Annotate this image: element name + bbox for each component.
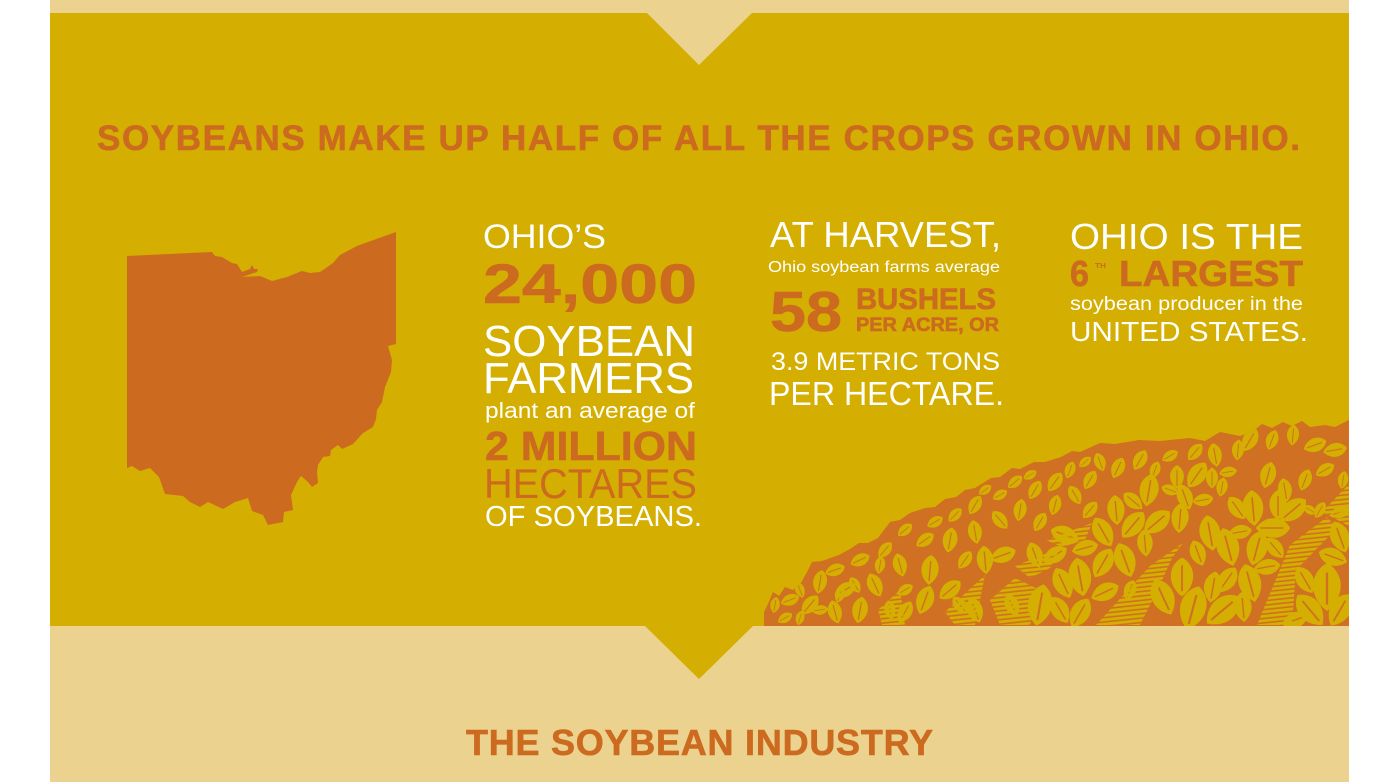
text block: 24,000 farmers: OF SOYBEANS.: [485, 501, 702, 533]
text block: harvest yield: BUSHELS: [856, 283, 996, 316]
text block: harvest yield: [768, 214, 1004, 412]
furrows: [878, 484, 1349, 625]
icon: Ohio state map: [127, 232, 396, 525]
text block: 24,000 farmers: HECTARES: [484, 460, 697, 507]
text block: 6th largest producer: LARGEST: [1119, 253, 1303, 294]
illustration: soybean field: [764, 420, 1358, 633]
text block: harvest yield: AT HARVEST,: [770, 214, 1001, 255]
text block: 24,000 farmers: 24,000: [483, 252, 697, 315]
text block: 6th largest producer: OHIO IS THE: [1070, 216, 1303, 257]
text block: 6th largest producer: UNITED STATES.: [1070, 316, 1308, 347]
text block: 6th largest producer: [1070, 216, 1308, 347]
text block: 24,000 farmers: [483, 218, 702, 533]
text block: 6th largest producer: soybean producer in the: [1070, 294, 1303, 315]
background: top cream band: [50, 0, 1349, 13]
text block: 24,000 farmers: OHIO’S: [483, 218, 606, 256]
text block: harvest yield: 58: [770, 280, 842, 344]
text block: 6th largest producer: 6: [1070, 253, 1089, 294]
text block: 24,000 farmers: 2 MILLION: [485, 423, 697, 469]
heading: soybeans half of crops: SOYBEANS MAKE UP HALF OF ALL THE CROPS GROWN IN OHIO.: [97, 119, 1300, 158]
panel: mustard Ohio section: [50, 13, 1349, 626]
text block: 24,000 farmers: SOYBEAN: [483, 317, 695, 366]
arrow: top notch: [647, 13, 752, 65]
heading: the soybean industry: THE SOYBEAN INDUSTRY: [466, 722, 933, 763]
text block: harvest yield: 3.9 METRIC TONS: [771, 348, 1000, 376]
text block: 24,000 farmers: FARMERS: [483, 354, 694, 403]
text block: harvest yield: PER ACRE, OR: [856, 315, 999, 336]
text block: harvest yield: PER HECTARE.: [769, 375, 1004, 412]
background: bottom cream section: [50, 626, 1349, 782]
text block: 6th largest producer: TH: [1095, 263, 1106, 270]
text block: 24,000 farmers: plant an average of: [485, 398, 696, 423]
arrow: bottom pointer: [645, 626, 753, 679]
text block: harvest yield: Ohio soybean farms average: [768, 259, 1000, 276]
leaves: [769, 424, 1358, 633]
